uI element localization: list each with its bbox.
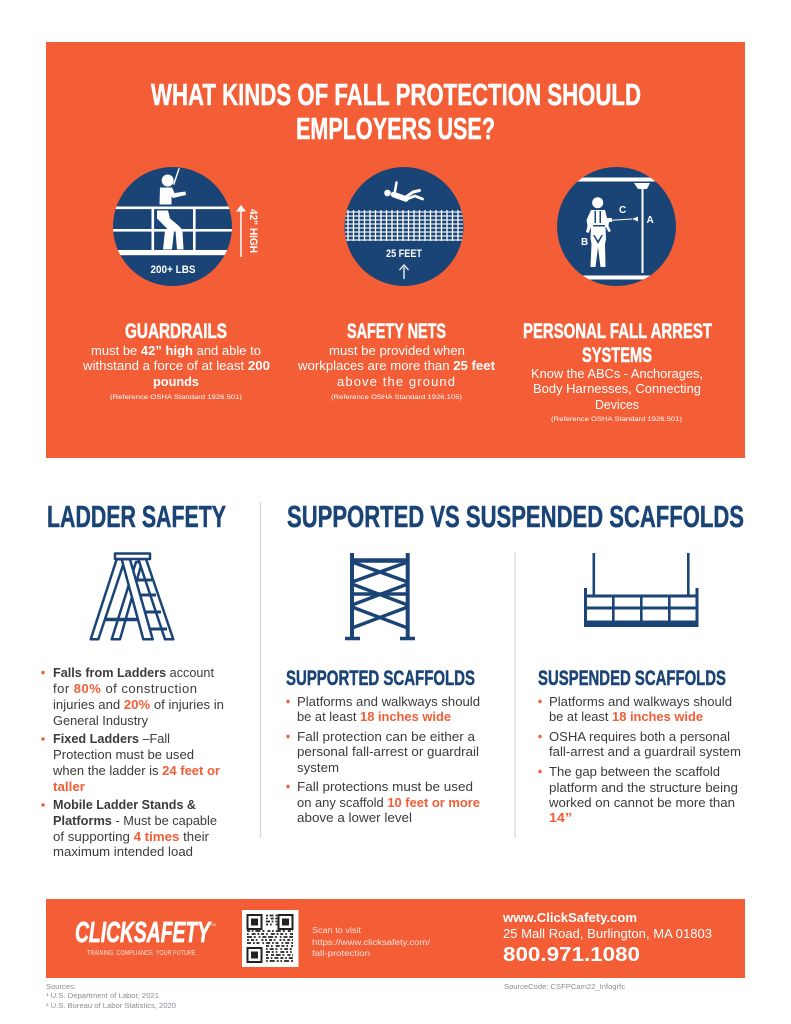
text block: personal fall arrest systems: SYSTEMS [582,344,652,367]
logo: CLICKSAFETY [75,917,212,949]
text block: guardrails: withstand a force of at least 200 [82,358,270,373]
list: ladder safety [41,665,224,859]
text block: guardrails: GUARDRAILS [125,320,227,343]
text block: guardrails: pounds [153,374,199,389]
footer banner [46,899,745,978]
text block: guardrails [82,320,270,401]
logo [75,917,216,957]
QR caption: fall-protection [312,949,370,958]
list: ladder safety: injuries and 20% of injuries in [53,697,224,712]
text block: guardrails: must be 42” high and able to [91,343,261,358]
text block: suspended scaffolds: fall-arrest and a guardrail system [549,744,741,759]
icon: suspended scaffold [584,553,698,627]
icon: ladder [91,554,173,639]
text block: supported scaffolds: above a lower level [297,810,412,825]
list: ladder safety: taller [53,779,85,794]
text block: supported scaffolds: on any scaffold 10 feet or more [297,795,480,810]
text block: suspended scaffolds: 14” [549,810,572,825]
text block: suspended scaffolds: be at least 18 inches wide [549,709,703,724]
text block: suspended scaffolds: The gap between the scaffold [549,764,720,779]
text block: supported scaffolds: Fall protection can be either a [297,729,476,744]
text block: safety nets: workplaces are more than 25 feet [297,358,496,373]
text block: personal fall arrest systems: (Reference OSHA Standard 1926.501) [551,417,682,423]
title: EMPLOYERS USE? [296,111,495,146]
arrow: 42 inch height: 42” HIGH [247,209,259,253]
text block: suspended scaffolds: OSHA requires both a personal [549,729,730,744]
list: ladder safety: Platforms - Must be capable [53,813,217,828]
list: ladder safety: Fixed Ladders –Fall [53,731,170,746]
list: ladder safety: of supporting 4 times their [53,829,210,844]
contact details: 25 Mall Road, Burlington, MA 01803 [503,926,712,941]
text block: safety nets: above the ground [337,374,455,389]
QR caption: https://www.clicksafety.com/ [312,938,431,947]
text block: supported scaffolds: Platforms and walkways should [297,694,480,709]
sources: ² U.S. Bureau of Labor Statistics, 2020 [46,1003,176,1010]
text block: personal fall arrest systems: Devices [595,397,639,412]
icon: safety net: 25 FEET [386,248,422,260]
text block: safety nets [297,320,496,401]
contact details: 800.971.1080 [503,944,640,966]
text block: suspended scaffolds [538,667,741,825]
list: ladder safety: maximum intended load [53,844,193,859]
text block: supported scaffolds: be at least 18 inches wide [297,709,451,724]
text block: guardrails: (Reference OSHA Standard 1926.501) [110,395,242,401]
text block: safety nets: must be provided when [329,343,465,358]
list: ladder safety: Protection must be used [53,747,194,762]
logo: TM [210,922,216,927]
source code: SourceCode: CSFPCam22_Infogrfc [504,984,626,991]
QR caption: Scan to visit [312,926,362,935]
icon: personal fall arrest: B [581,237,588,248]
text block: safety nets: SAFETY NETS [347,320,446,343]
QR caption [312,926,431,958]
icon: guardrail: 200+ LBS [150,264,196,276]
QR code [242,910,298,967]
list: ladder safety: Falls from Ladders account [53,665,214,680]
text block: supported scaffolds: SUPPORTED SCAFFOLDS [286,667,475,690]
list: ladder safety: for 80% of construction [53,681,197,696]
sources: ¹ U.S. Department of Labor, 2021 [46,993,159,1000]
text block: personal fall arrest systems: Body Harnesses, Connecting [533,381,701,396]
arrow: 42 inch height [236,205,259,257]
text block: safety nets: (Reference OSHA Standard 1926.105) [331,395,462,401]
text block: supported scaffolds: Fall protections must be used [297,779,473,794]
logo: TRAINING. COMPLIANCE. YOUR FUTURE. [87,950,197,957]
text block: suspended scaffolds: platform and the structure being [549,780,738,795]
list: ladder safety: when the ladder is 24 feet or [52,763,220,778]
icon: personal fall arrest: A [646,215,654,226]
text block: suspended scaffolds: worked on cannot be more than [548,795,735,810]
panel: fall protection types [46,42,745,458]
text block: personal fall arrest systems: Know the ABCs - Anchorages, [531,366,703,381]
text block: suspended scaffolds: Platforms and walkways should [549,694,732,709]
contact details: www.ClickSafety.com [502,910,637,925]
icon: safety net [344,167,464,286]
title [151,77,641,146]
icon: personal fall arrest: C [619,205,626,216]
icon: guardrail [113,167,233,286]
sources [46,984,176,1010]
list: ladder safety: General Industry [53,713,148,728]
text block: supported scaffolds: system [297,760,339,775]
text block: supported scaffolds: personal fall-arrest or guardrail [297,744,479,759]
heading: ladder safety: LADDER SAFETY [47,499,226,534]
contact details [502,910,712,966]
icon: supported scaffold [345,553,415,638]
sources: Sources: [46,984,76,991]
icon: personal fall arrest [557,167,677,286]
text block: supported scaffolds [286,667,480,825]
text block: personal fall arrest systems [523,320,712,423]
text block: personal fall arrest systems: PERSONAL FALL ARREST [523,320,712,343]
list: ladder safety: Mobile Ladder Stands & [53,797,196,812]
